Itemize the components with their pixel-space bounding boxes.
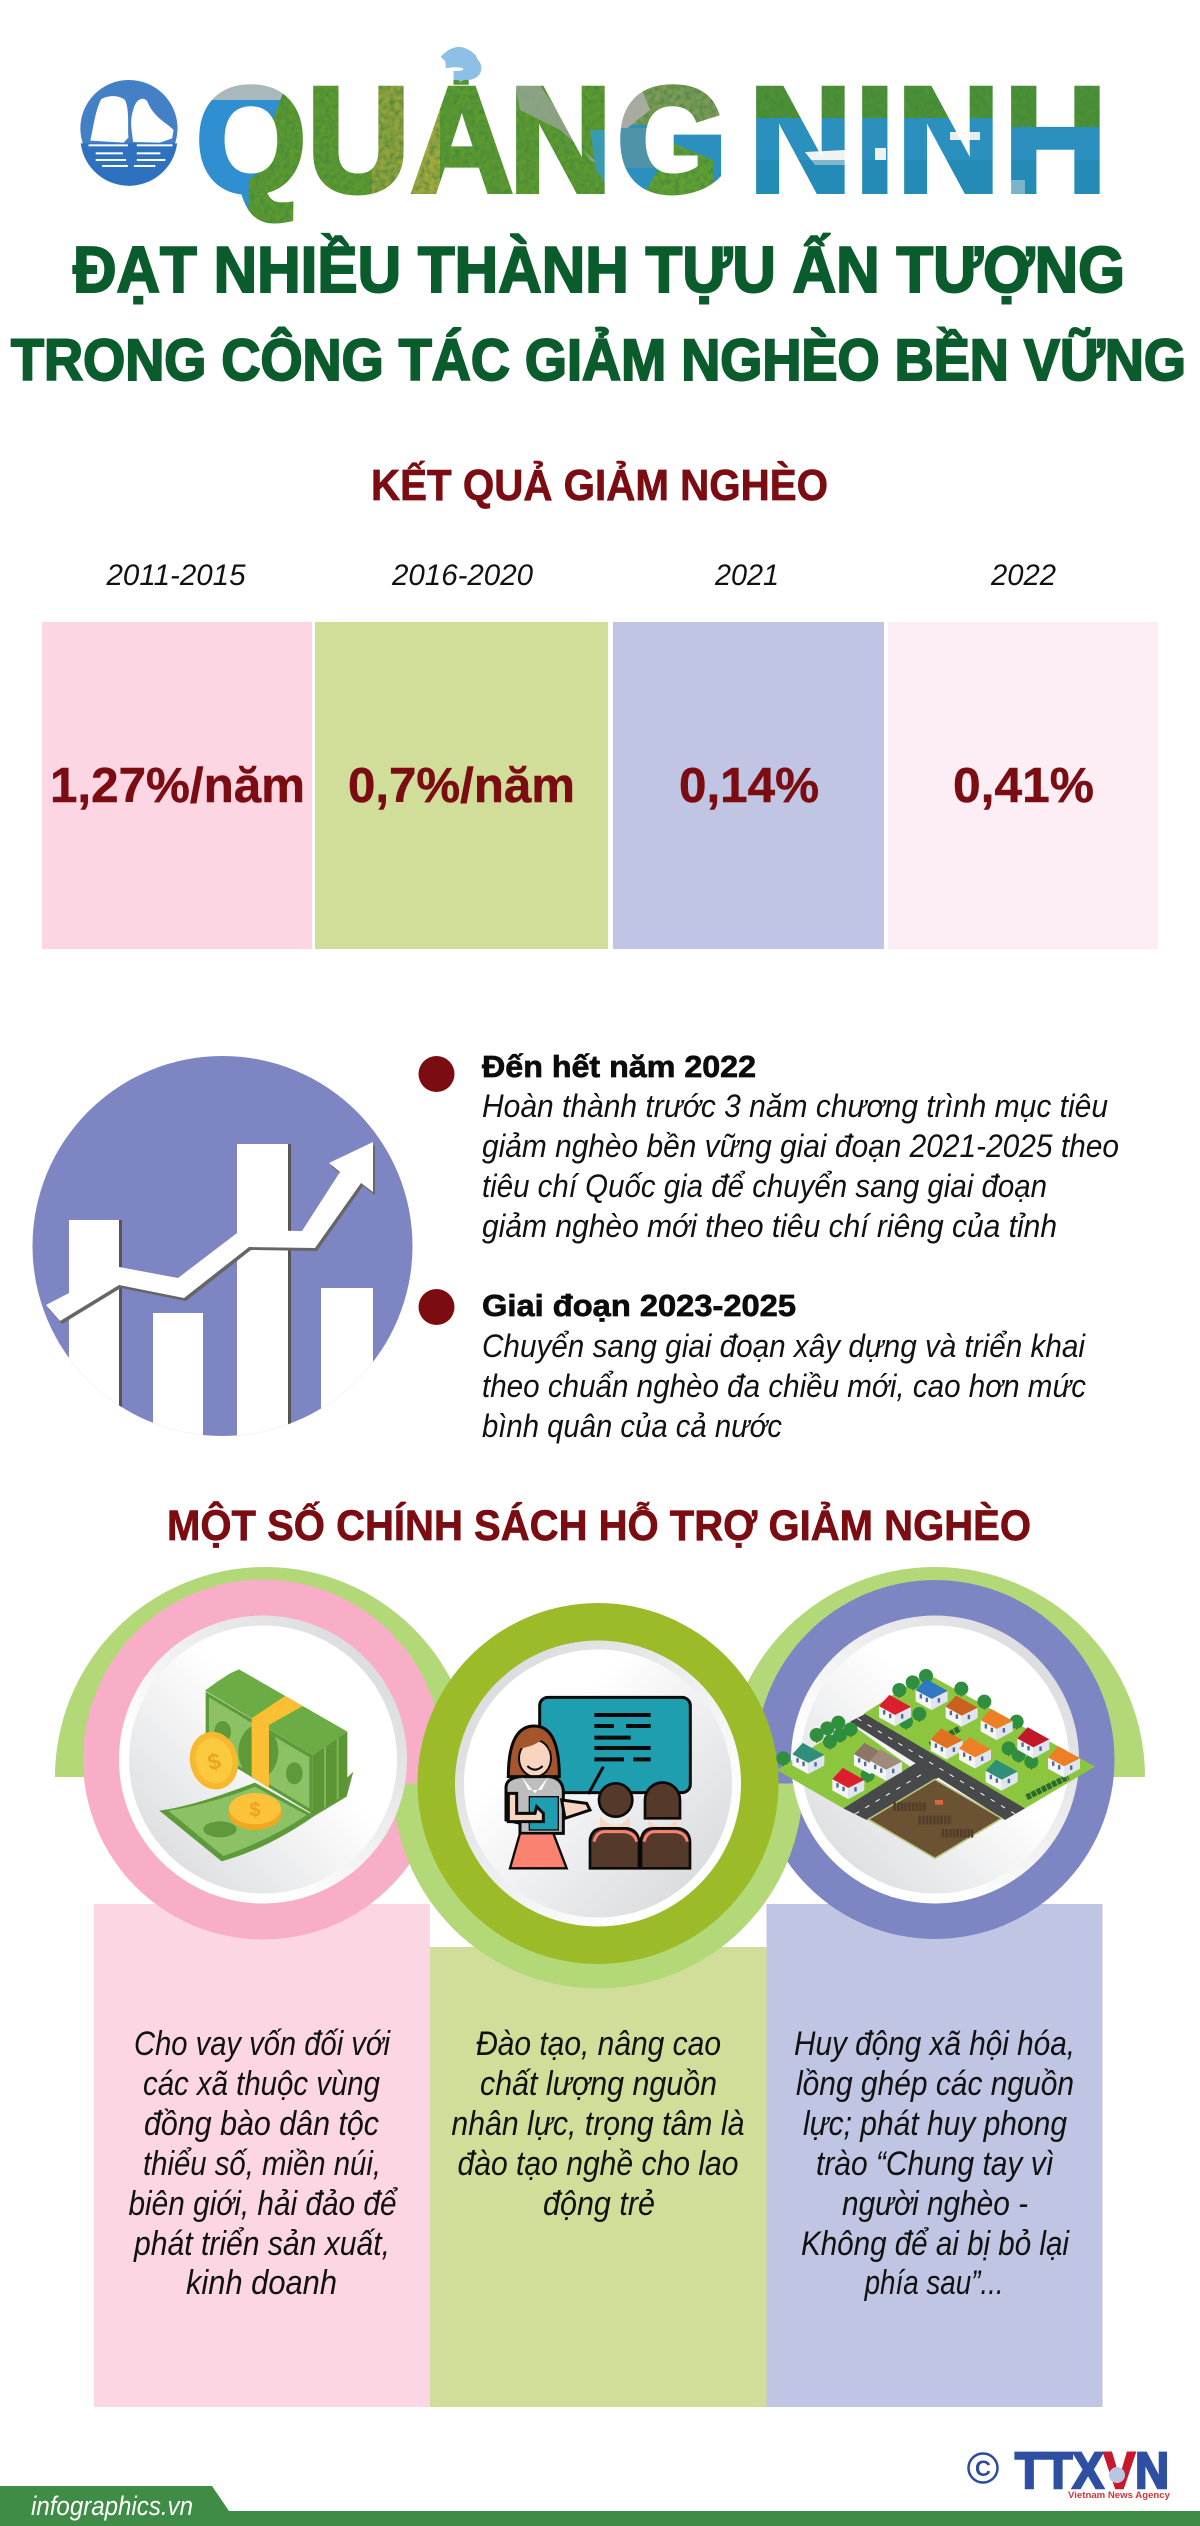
text block: 2023-2025 period [418,1288,1086,1444]
icon: money stack and coins [159,1669,353,1861]
icon: teacher with students [506,1697,690,1868]
subtitle: two green headline lines: ĐẠT NHIỀU THÀNH TỰU ẤN TƯỢNG [73,233,1125,306]
text: column 2: nhân lực, trọng tâm là [451,2105,744,2143]
text: column 1: đồng bào dân tộc [144,2105,379,2143]
result values: 1,27%/năm [50,759,305,813]
text: column 2: chất lượng nguồn [480,2065,717,2103]
text: column 1: kinh doanh [186,2264,337,2302]
subtitle: two green headline lines [11,233,1186,393]
text: column 1: biên giới, hải đảo để [128,2185,398,2223]
text: column 3: người nghèo - [842,2185,1028,2223]
text: column 3: Không để ai bị bỏ lại [801,2225,1070,2263]
text block: 2023-2025 period: bình quân của cả nước [482,1408,782,1444]
text block: by end of 2022: tiêu chí Quốc gia để chuyển sang giai đoạn [482,1168,1047,1204]
text block: by end of 2022: Đến hết năm 2022 [482,1049,756,1084]
text: column 1: thiểu số, miền núi, [143,2145,381,2183]
footer site label: infographics.vn [31,2491,193,2521]
text: column 3: trào “Chung tay vì [816,2145,1054,2183]
inner discs [119,1616,1079,1926]
text: column 3 [794,2025,1075,2302]
logo: TTXVN Vietnam News Agency: Vietnam News Agency [1068,2490,1171,2501]
result values: 0,14% [679,759,819,813]
text block: by end of 2022: Hoàn thành trước 3 năm chương trình mục tiêu [482,1088,1108,1124]
year labels: 2021 [714,559,779,592]
text: column 3: phía sau”... [864,2264,1004,2302]
column backgrounds [94,1904,1102,2407]
panel: policy columns and rings [55,1567,1145,2407]
icon: village and fields [776,1669,1095,1858]
text: column 2: Đào tạo, nâng cao [476,2025,721,2063]
text block: 2023-2025 period: Giai đoạn 2023-2025 [482,1288,796,1323]
icon: money stack and coins: $ [249,1800,261,1822]
text: column 1: các xã thuộc vùng [143,2065,380,2103]
year labels: 2022 [990,559,1056,592]
year labels [106,559,1056,592]
panel: results by period [42,559,1158,949]
text: column 3: lồng ghép các nguồn [796,2065,1074,2103]
text block: by end of 2022: giảm nghèo bền vững giai đoạn 2021-2025 theo [482,1128,1119,1164]
text: column 1: phát triển sản xuất, [133,2225,390,2263]
text: column 1: Cho vay vốn đối với [134,2025,391,2063]
icon: money stack and coins: $ [205,1747,223,1775]
result values: 0,41% [953,759,1094,813]
year labels: 2011-2015 [106,559,246,592]
text block: 2023-2025 period: Chuyển sang giai đoạn xây dựng và triển khai [482,1328,1086,1364]
text: column 2: đào tạo nghề cho lao [458,2145,738,2183]
year labels: 2016-2020 [391,559,533,592]
footer band [0,2486,1200,2526]
text: column 2 [451,2025,744,2223]
text block: by end of 2022 [418,1049,1119,1244]
chart icon: rising bars and arrow in circle [32,1056,412,1450]
text: column 3: Huy động xã hội hóa, [794,2025,1075,2063]
text block: by end of 2022: giảm nghèo mới theo tiêu chí riêng của tỉnh [482,1208,1057,1244]
text: column 2: động trẻ [543,2185,655,2223]
result values [50,759,1094,813]
result values: 0,7%/năm [348,759,575,813]
heading: support policies: MỘT SỐ CHÍNH SÁCH HỖ TRỢ GIẢM NGHÈO [167,1501,1031,1550]
text: column 3: lực; phát huy phong [803,2105,1067,2143]
logo: TTXVN Vietnam News Agency: TTXVN [1015,2442,1169,2499]
logo: Quảng Ninh emblem [80,80,177,186]
text: column 1 [128,2025,398,2302]
light green half discs [55,1567,1145,1777]
logo: TTXVN Vietnam News Agency: C [975,2456,991,2481]
title: Quảng Ninh photo-filled lettering: QUẢNG NINH [196,56,1107,224]
outer rings [83,1580,1114,1988]
colored result boxes [42,622,1158,949]
heading: poverty reduction results: KẾT QUẢ GIẢM NGHÈO [371,460,828,510]
text block: 2023-2025 period: theo chuẩn nghèo đa chiều mới, cao hơn mức [482,1368,1086,1404]
